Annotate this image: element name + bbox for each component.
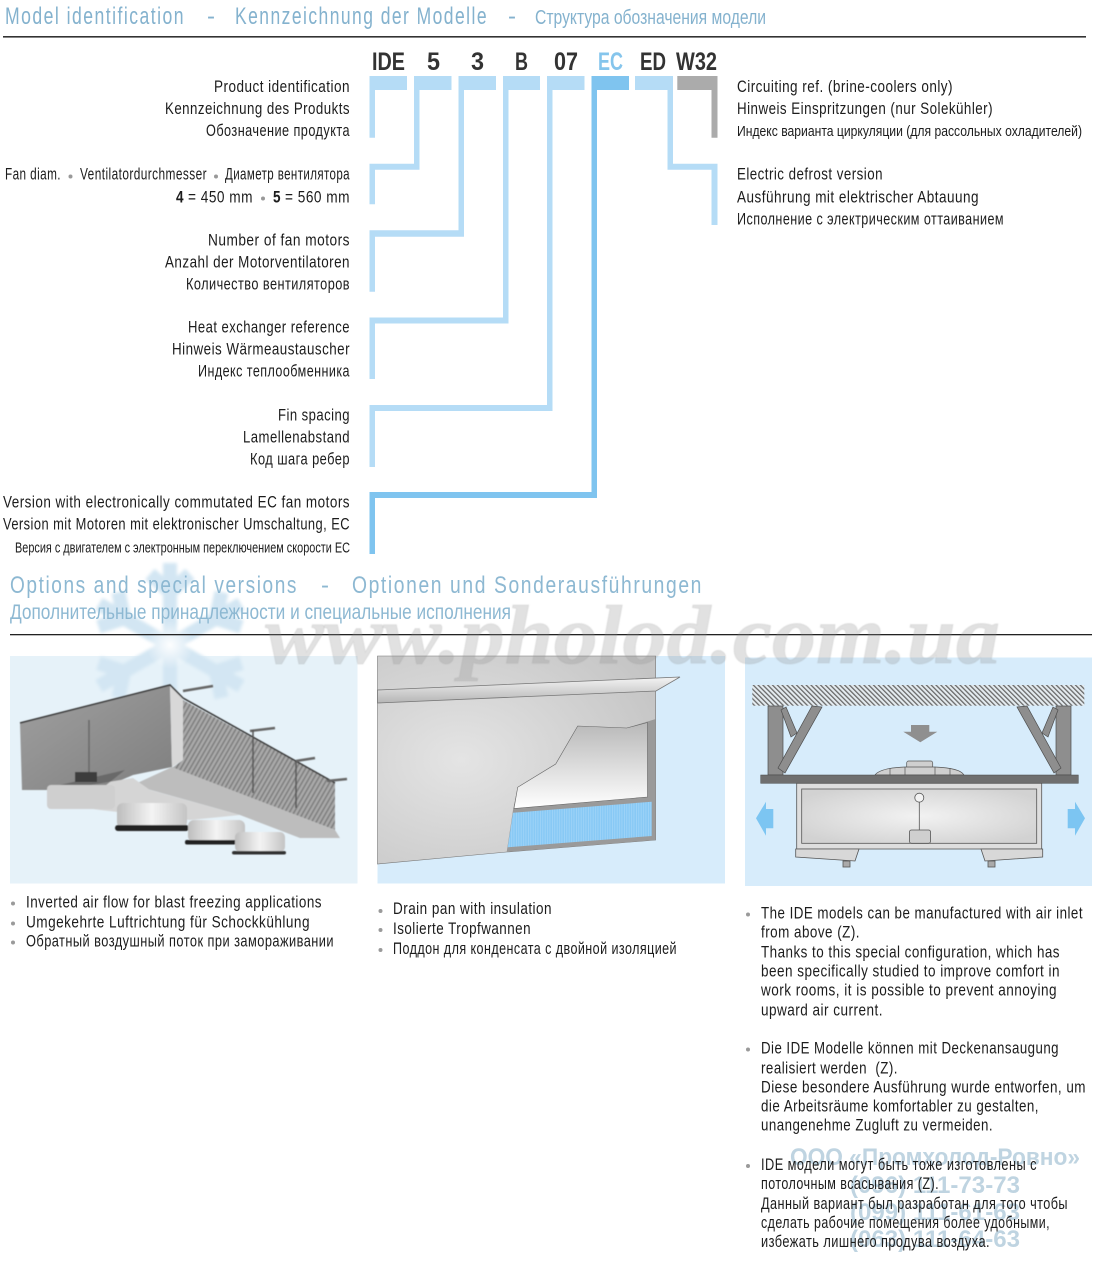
label: circuiting reference: Circuiting ref. (brine-coolers only) <box>737 77 953 96</box>
model code letters: EC <box>598 48 623 76</box>
label: circuiting reference: Hinweis Einspritzungen (nur Solekühler) <box>737 99 993 118</box>
label: product identification <box>165 77 350 140</box>
label: fan diameter: = 560 mm <box>285 188 350 206</box>
connector: heat exchanger <box>370 76 540 379</box>
heading: options and special versions <box>10 572 703 624</box>
text: IDE models english <box>746 904 1083 1020</box>
watermark: company contacts: ООО «Промхолод-Ровно» <box>790 1144 1080 1171</box>
label: EC version: Version mit Motoren mit elektronischer Umschaltung, EC <box>3 514 350 534</box>
label: fan diameter: 4 <box>176 188 184 206</box>
image: inverted air flow cooler unit <box>20 685 347 854</box>
right bracket <box>1017 706 1071 775</box>
text: IDE models english: from above (Z). <box>761 922 860 942</box>
model code letters: ED <box>640 48 666 76</box>
watermark: company contacts: (099) 111-61-63 <box>850 1199 1020 1226</box>
text: inverted air flow: Inverted air flow for blast freezing applications <box>26 892 322 912</box>
image: drain pan with insulation <box>378 656 680 864</box>
watermark: company contacts: (096) 111-73-73 <box>850 1172 1020 1199</box>
watermark: company contacts <box>790 1144 1080 1253</box>
label: product identification: Kennzeichnung des Produkts <box>165 99 350 118</box>
label: fan diameter: 5 <box>273 188 281 206</box>
label: number of fan motors: Number of fan motors <box>208 230 350 250</box>
model code letters <box>372 48 717 76</box>
label: fin spacing: Код шага ребер <box>250 450 350 468</box>
label: fan diameter: Ventilatordurchmesser <box>80 164 207 184</box>
text: IDE models english: upward air current. <box>761 1000 883 1020</box>
text: IDE models german: unangenehme Zugluft zu vermeiden. <box>761 1116 993 1134</box>
label: fin spacing <box>243 406 350 468</box>
label: fan diameter: Диаметр вентилятора <box>225 164 350 184</box>
label: heat exchanger reference: Индекс теплообменника <box>198 362 350 380</box>
image: ceiling-mounted unit with air inlet from above <box>752 685 1085 867</box>
label: electric defrost: Исполнение с электрическим оттаиванием <box>737 210 1004 228</box>
text: IDE models russian <box>746 1155 1068 1251</box>
label: fan diameter: = 450 mm <box>188 188 253 206</box>
label: heat exchanger reference: Heat exchanger reference <box>188 318 350 336</box>
model code letters: B <box>515 48 528 76</box>
label: fan diameter <box>5 164 350 206</box>
heading: options and special versions: Optionen und Sonderausführungen <box>352 572 703 599</box>
label: fan diameter: Fan diam. <box>5 164 61 184</box>
heading: model identification: Структура обозначения модели <box>535 7 766 29</box>
fan <box>875 761 964 775</box>
connector: EC version <box>370 76 629 554</box>
text: inverted air flow: Обратный воздушный поток при замораживании <box>26 932 334 950</box>
unit body <box>796 783 1043 867</box>
watermark: company contacts: (063) 111-64-63 <box>850 1226 1020 1253</box>
model code letters: 07 <box>554 48 578 76</box>
label: fin spacing: Fin spacing <box>278 406 350 424</box>
arrow: air inlet down <box>903 725 937 742</box>
model code letters: W32 <box>676 48 717 76</box>
label: EC version: Версия с двигателем с электронным переключением скорости EC <box>15 540 350 556</box>
heading: model identification: - <box>207 3 217 30</box>
model code letters: IDE <box>372 48 405 76</box>
arrow: air outlet left <box>756 802 773 836</box>
watermark: www.pholod.com.ua: www.pholod.com.ua <box>265 589 1000 682</box>
text: drain pan <box>378 899 677 958</box>
label: EC version: Version with electronically commutated EC fan motors <box>3 492 350 512</box>
model code letters: 5 <box>427 48 440 76</box>
text: drain pan: Поддон для конденсата с двойной изоляцией <box>393 939 677 958</box>
connector: IDE <box>370 76 407 138</box>
heading: model identification <box>5 3 766 30</box>
text: inverted air flow: Umgekehrte Luftrichtung für Schockkühlung <box>26 912 310 932</box>
heading: model identification: Kennzeichnung der Modelle <box>235 3 488 30</box>
text: IDE models german: realisiert werden (Z). <box>761 1058 898 1078</box>
label: product identification: Product identification <box>214 77 350 96</box>
image panel backgrounds <box>10 656 1092 886</box>
text: IDE models russian: избежать лишнего продува воздуха. <box>761 1232 990 1251</box>
label: number of fan motors <box>165 230 350 294</box>
connector: fan motors <box>370 76 496 292</box>
label: electric defrost: Electric defrost version <box>737 164 883 184</box>
heading: model identification: - <box>508 3 518 30</box>
connector: circuiting <box>677 76 718 138</box>
connector: fan diameter <box>370 76 452 204</box>
heading: options and special versions: Дополнительные принадлежности и специальные исполнения <box>10 601 511 624</box>
text: inverted air flow <box>11 892 334 950</box>
connector: electric defrost <box>635 76 718 225</box>
heading: model identification: Model identification <box>5 3 185 30</box>
text: IDE models german <box>746 1038 1086 1134</box>
label: EC version <box>3 492 350 556</box>
label: number of fan motors: Количество вентиляторов <box>186 274 350 294</box>
connector: fin spacing <box>370 76 584 467</box>
label: electric defrost <box>737 164 1004 228</box>
text: drain pan: Isolierte Tropfwannen <box>393 919 531 938</box>
label: heat exchanger reference <box>172 318 350 380</box>
heading: options and special versions: Options and special versions <box>10 572 298 599</box>
left bracket <box>768 706 822 775</box>
icon: snowflake watermark <box>89 563 251 727</box>
text: IDE models russian: потолочным всасывания (Z). <box>761 1174 939 1193</box>
label: circuiting reference <box>737 77 1082 140</box>
label: product identification: Обозначение продукта <box>206 121 350 140</box>
label: fin spacing: Lamellenabstand <box>243 428 350 446</box>
arrow: air outlet right <box>1068 802 1085 836</box>
heading: options and special versions: - <box>321 572 331 599</box>
label: heat exchanger reference: Hinweis Wärmeaustauscher <box>172 340 350 358</box>
label: number of fan motors: Anzahl der Motorventilatoren <box>165 252 350 272</box>
label: electric defrost: Ausführung mit elektrischer Abtauung <box>737 188 979 206</box>
model code letters: 3 <box>471 48 484 76</box>
text: drain pan: Drain pan with insulation <box>393 899 552 918</box>
